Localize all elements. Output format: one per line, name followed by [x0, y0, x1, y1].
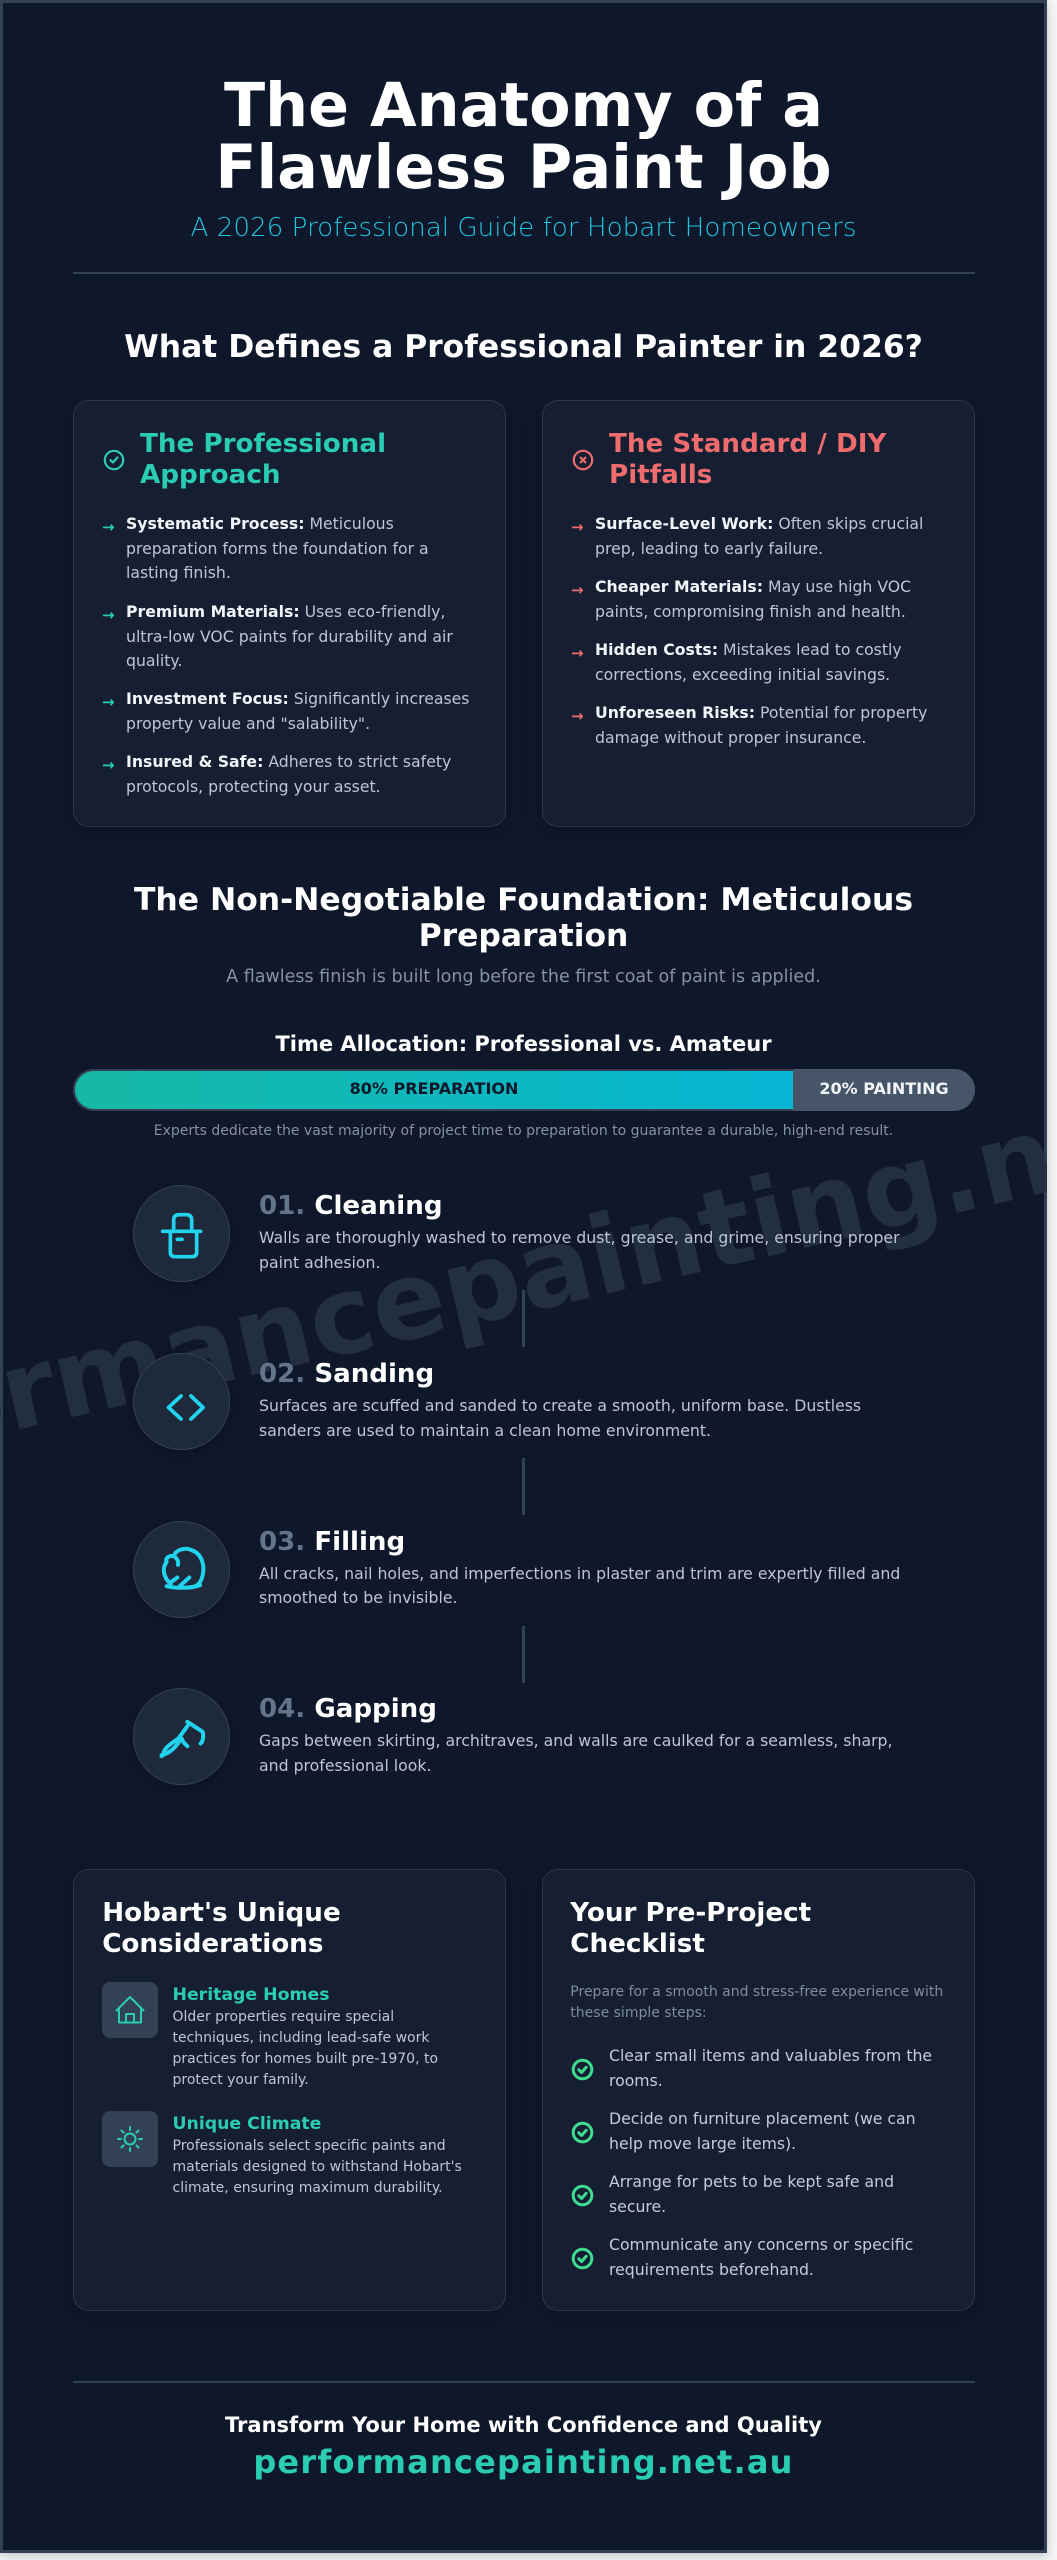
heading: the non-negotiable foundation: [134, 882, 913, 954]
icon: house: [102, 1982, 158, 2038]
list item: cheaper materials: →: [571, 581, 584, 599]
list item: cheaper materials: Cheaper Materials: May use high VOC: [595, 577, 911, 596]
list item: unforeseen risks: Unforeseen Risks: Potential for property: [595, 703, 927, 722]
list item: systematic process: [102, 514, 429, 582]
list item: surface-level work: →: [571, 518, 584, 536]
icon: check circle: [104, 450, 124, 470]
step 1 description: paint adhesion.: [259, 1252, 380, 1272]
checklist item 1: [572, 2046, 932, 2090]
heading: the professional approach: [140, 428, 386, 490]
list item: systematic process: lasting finish.: [126, 563, 231, 582]
checklist item 4: requirements beforehand.: [609, 2260, 814, 2278]
chart caption: Experts dedicate the vast majority of project time to preparation to guarantee a durable, high-end result.: [154, 1123, 893, 1139]
heading: time allocation: Time Allocation: Professional vs. Amateur: [275, 1032, 772, 1056]
list item: unforeseen risks: damage without proper insurance.: [595, 728, 866, 746]
step 3 description: [259, 1564, 900, 1607]
checklist item 1: Clear small items and valuables from the: [609, 2046, 932, 2065]
checklist intro: Prepare for a smooth and stress-free experience with: [570, 1984, 943, 2000]
icon: x circle: [572, 450, 594, 470]
list item: systematic process: →: [102, 518, 115, 536]
step 4 description: and professional look.: [259, 1756, 432, 1774]
checklist item 1: rooms.: [609, 2070, 663, 2090]
checklist item 2: [572, 2109, 916, 2152]
list item: insured and safe: protocols, protecting your asset.: [126, 776, 381, 796]
checklist item 4: Communicate any concerns or specific: [609, 2235, 913, 2254]
list item: unforeseen risks: →: [571, 707, 584, 725]
icon: sun: [102, 2111, 158, 2167]
bar segment: 20% painting: [793, 1069, 975, 1111]
list item: investment focus: property value and "salability".: [126, 714, 370, 733]
list item: investment focus: [102, 689, 469, 733]
list item: insured and safe: Insured & Safe: Adheres to strict safety: [126, 752, 451, 771]
bar segment: 20% painting: 20% PAINTING: [819, 1079, 949, 1098]
unique climate text: [172, 2138, 462, 2196]
heading: the non-negotiable foundation: Preparation: [419, 918, 628, 954]
checklist item 2: Decide on furniture placement (we can: [609, 2109, 916, 2128]
list item: cheaper materials: [571, 577, 911, 620]
checklist item 4: [572, 2235, 913, 2278]
list item: cheaper materials: paints, compromising finish and health.: [595, 602, 906, 620]
heading: what defines a professional painter: What Defines a Professional Painter in 2026?: [124, 328, 923, 364]
list item: premium materials: quality.: [126, 651, 182, 670]
heritage homes text: techniques, including lead-safe work: [172, 2030, 429, 2046]
list item: surface-level work: Surface-Level Work: Often skips crucial: [595, 514, 923, 533]
bar segment: 80% preparation: 80% PREPARATION: [350, 1079, 518, 1098]
step 1 description: Walls are thoroughly washed to remove dust, grease, and grime, ensuring proper: [259, 1228, 900, 1247]
step 3 description: All cracks, nail holes, and imperfections in plaster and trim are expertly filled and: [259, 1564, 900, 1582]
step 2 description: sanders are used to maintain a clean home environment.: [259, 1420, 711, 1440]
step 2 title: 02. Sanding: [259, 1359, 434, 1389]
list item: investment focus: Investment Focus: Significantly increases: [126, 689, 469, 708]
list item: hidden costs: corrections, exceeding initial savings.: [595, 664, 890, 684]
list item: systematic process: preparation forms the foundation for a: [126, 539, 429, 558]
heading: Hobart's unique considerations: Hobart's Unique: [102, 1898, 341, 1928]
footer tagline: Transform Your Home with Confidence and Quality: [225, 2412, 822, 2436]
list item: surface-level work: prep, leading to early failure.: [595, 539, 823, 558]
heading: the non-negotiable foundation: The Non-Negotiable Foundation: Meticulous: [134, 882, 913, 918]
heading: your pre-project checklist: Your Pre-Project: [570, 1898, 811, 1928]
checklist intro: these simple steps:: [570, 2004, 707, 2020]
step 1 description: [259, 1228, 900, 1272]
heading: Hobart's unique considerations: [102, 1898, 341, 1959]
list item: premium materials: →: [102, 606, 115, 624]
heading: your pre-project checklist: Checklist: [570, 1929, 705, 1959]
panel: the standard / DIY pitfalls: [542, 400, 975, 827]
step 4 icon: caulking gun: [133, 1688, 230, 1784]
heading: the standard / DIY pitfalls: Pitfalls: [609, 460, 712, 490]
panel: the professional approach: [73, 400, 506, 827]
title: The Anatomy of a: [224, 71, 823, 141]
subtitle: A 2026 Professional Guide for Hobart Homeowners: [190, 213, 857, 243]
panel: Hobart's unique considerations: [73, 1869, 506, 2311]
heading: the standard / DIY pitfalls: [609, 428, 886, 490]
panel: your pre-project checklist: [542, 1869, 975, 2311]
heading: the professional approach: Approach: [140, 460, 281, 490]
list item: premium materials: ultra-low VOC paints for durability and air: [126, 626, 453, 646]
list item: hidden costs: →: [571, 644, 584, 662]
list item: premium materials: [102, 602, 453, 670]
checklist item 2: help move large items).: [609, 2134, 796, 2152]
step 4 description: [259, 1731, 893, 1774]
checklist item 3: [572, 2172, 894, 2216]
unique climate title: Unique Climate: [172, 2114, 321, 2134]
footer url: performancepainting.net.au: [253, 2443, 794, 2481]
unique climate text: climate, ensuring maximum durability.: [172, 2180, 443, 2196]
step 2 description: Surfaces are scuffed and sanded to create a smooth, uniform base. Dustless: [259, 1396, 861, 1415]
bar chart: time allocation: [73, 1069, 975, 1111]
bar segment: 80% preparation: [75, 1071, 793, 1109]
heritage homes title: Heritage Homes: [172, 1985, 330, 2005]
title: Flawless Paint Job: [215, 133, 832, 203]
step 2 icon: code brackets: [133, 1352, 230, 1450]
list item: hidden costs: [571, 640, 902, 684]
unique climate text: materials designed to withstand Hobart's: [172, 2159, 462, 2175]
step 1 title: 01. Cleaning: [259, 1191, 442, 1221]
heading: the standard / DIY pitfalls: The Standard / DIY: [609, 428, 886, 458]
heritage homes text: protect your family.: [172, 2072, 309, 2088]
list item: insured and safe: →: [102, 756, 115, 774]
list item: unforeseen risks: [571, 703, 927, 746]
heading: your pre-project checklist: [570, 1898, 811, 1959]
list item: insured and safe: [102, 752, 451, 796]
checklist intro: [570, 1984, 943, 2020]
list item: investment focus: →: [102, 693, 115, 711]
list item: hidden costs: Hidden Costs: Mistakes lead to costly: [595, 640, 902, 659]
step 2 description: [259, 1396, 861, 1440]
checklist item 3: Arrange for pets to be kept safe and: [609, 2172, 894, 2191]
list item: premium materials: Premium Materials: Uses eco-friendly,: [126, 602, 445, 621]
step 4 title: 04. Gapping: [259, 1694, 437, 1724]
step 3 icon: filler blob: [133, 1520, 230, 1618]
heritage homes text: [172, 2008, 438, 2088]
title: [215, 71, 832, 203]
step 3 title: 03. Filling: [259, 1527, 405, 1557]
step 3 description: smoothed to be invisible.: [259, 1588, 458, 1607]
step 4 description: Gaps between skirting, architraves, and walls are caulked for a seamless, sharp,: [259, 1731, 893, 1750]
heritage homes text: Older properties require special: [172, 2008, 394, 2024]
list item: systematic process: Systematic Process: Meticulous: [126, 514, 394, 533]
heading: the professional approach: The Professional: [140, 428, 386, 458]
heading: Hobart's unique considerations: Considerations: [102, 1929, 323, 1959]
heritage homes text: practices for homes built pre-1970, to: [172, 2050, 438, 2066]
checklist item 3: secure.: [609, 2196, 666, 2216]
step 1 icon: bucket: [133, 1184, 230, 1282]
unique climate text: Professionals select specific paints and: [172, 2138, 446, 2154]
list item: surface-level work: [571, 514, 923, 558]
section subtitle: A flawless finish is built long before the first coat of paint is applied.: [226, 967, 821, 987]
